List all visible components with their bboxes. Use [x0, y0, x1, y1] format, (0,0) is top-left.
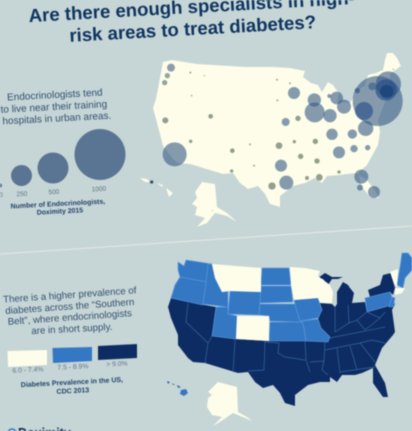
Utah	[212, 307, 237, 339]
Hawaii	[180, 389, 188, 396]
Hawaii	[140, 178, 173, 197]
text block: southern belt: diabetes across the “Southern	[5, 297, 135, 317]
text block: endocrinologists: hospitals in urban areas.	[2, 111, 112, 127]
divider	[0, 226, 412, 254]
prevalence legend: 7.5 - 8.9%	[57, 363, 89, 372]
Missouri	[302, 319, 330, 342]
Nebraska	[259, 304, 303, 322]
legend swatch: high	[98, 344, 137, 360]
text block: southern belt: are in short supply.	[31, 322, 113, 337]
text block: southern belt	[3, 285, 137, 337]
Maine and Massachusetts	[397, 253, 412, 288]
prevalence legend: 6.0 - 7.4%	[12, 366, 44, 375]
South Dakota	[260, 286, 293, 303]
map: diabetes prevalence	[167, 253, 412, 426]
map outline: contiguous US	[153, 53, 401, 207]
white states	[212, 264, 405, 341]
Oregon	[171, 277, 208, 305]
city bubbles	[150, 64, 403, 211]
Minnesota and Wisconsin	[290, 267, 333, 303]
Alaska	[207, 382, 252, 426]
southern belt states	[168, 282, 395, 406]
bubble size legend: Number of Endocrinologists,	[11, 199, 105, 210]
Montana	[212, 264, 261, 292]
map: endocrinologist bubbles	[140, 53, 403, 227]
New Jersey	[389, 297, 395, 307]
text block: endocrinologists: Endocrinologists tend	[7, 88, 103, 103]
state border lines	[186, 303, 385, 375]
legend swatch: medium	[52, 347, 92, 363]
Colorado	[236, 316, 269, 341]
prevalence legend	[8, 344, 137, 396]
text block: endocrinologists	[0, 88, 112, 127]
Connecticut	[395, 288, 405, 295]
title: risk areas to treat diabetes?	[69, 11, 317, 46]
text block: southern belt: Belt”, where endocrinologists	[7, 308, 132, 328]
Kansas	[269, 322, 306, 341]
Alaska	[192, 182, 237, 227]
Michigan upper peninsula	[318, 273, 343, 285]
text block: southern belt: There is a higher prevalence of	[3, 285, 137, 306]
Idaho	[203, 264, 228, 307]
bubble size legend: 1000	[92, 186, 107, 193]
prevalence legend: Diabetes Prevalence in the US,	[21, 377, 123, 389]
title	[28, 0, 355, 46]
bubble size legend: 500	[48, 189, 60, 196]
Pennsylvania	[365, 292, 395, 312]
New York	[368, 273, 395, 297]
blue states	[171, 253, 412, 342]
North Dakota	[261, 268, 291, 285]
text block: endocrinologists: to live near their training	[0, 99, 107, 116]
bubble size legend	[0, 129, 126, 217]
legend swatch: low	[8, 350, 47, 367]
bubble size legend: 250	[16, 191, 28, 198]
Vermont and New Hampshire	[390, 269, 398, 287]
prevalence legend: > 9.0%	[106, 360, 128, 369]
Wyoming	[228, 291, 261, 315]
bubble size legend: Doximity 2015	[37, 207, 83, 217]
Washington	[178, 260, 212, 282]
Iowa	[294, 298, 322, 321]
prevalence legend: CDC 2013	[56, 387, 90, 396]
